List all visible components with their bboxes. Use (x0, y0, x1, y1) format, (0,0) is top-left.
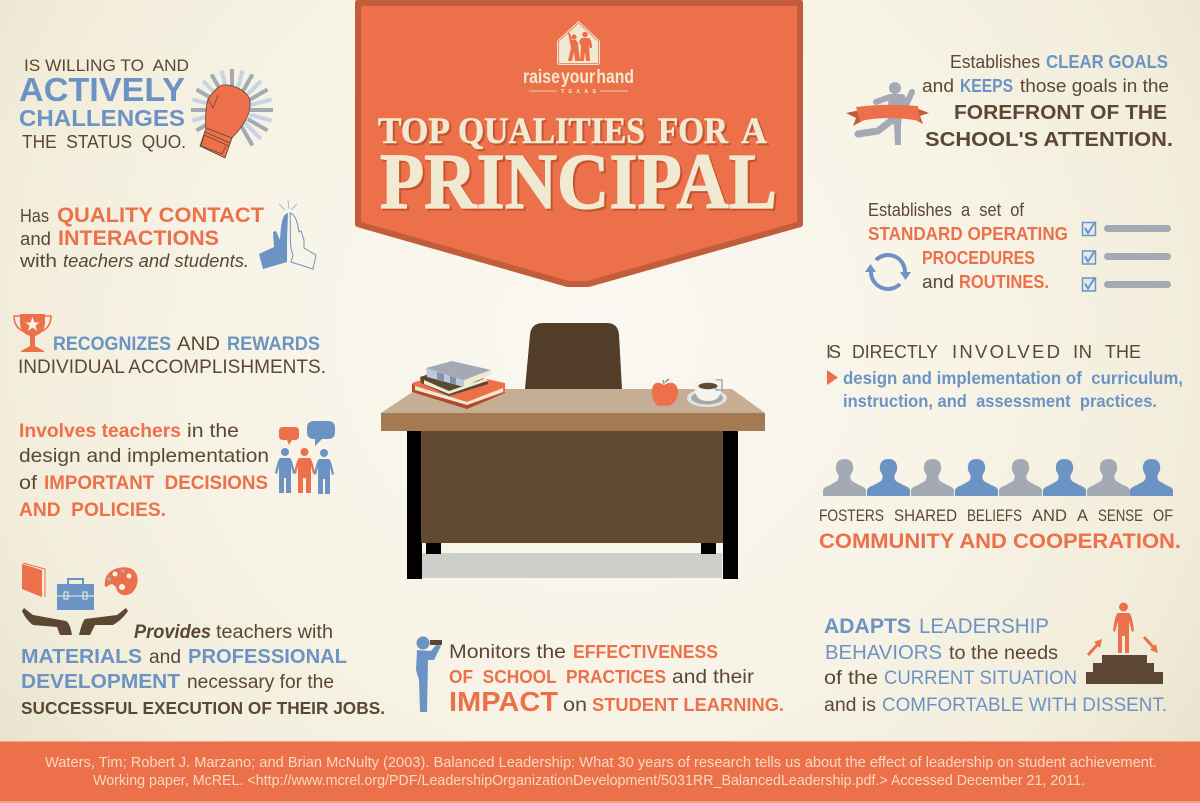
logo: raise your hand Texas: TEXAS (561, 89, 596, 95)
text: involves teachers: design and implementation (19, 445, 269, 467)
text: quality contact: teachers and students. (63, 250, 249, 271)
text: community and cooperation: A (1077, 506, 1089, 525)
icon: trophy (14, 314, 51, 352)
chair (525, 323, 622, 389)
icon: row of silhouettes (823, 459, 1173, 496)
block: adapts leadership (824, 602, 1167, 716)
text: adapts leadership: to the needs (949, 643, 1058, 664)
icon: person with binoculars (416, 636, 442, 712)
text: adapts leadership: CURRENT SITUATION (884, 668, 1077, 689)
text: involves teachers (19, 420, 269, 521)
text: provides materials: and (149, 647, 181, 668)
text: monitors effectiveness: Monitors the (449, 642, 566, 663)
text: clear goals: CLEAR GOALS (1046, 52, 1168, 72)
icon: boxing glove with rays (191, 69, 273, 158)
text: is directly involved: DIRECTLY (852, 341, 938, 362)
text: quality contact: INTERACTIONS (58, 227, 219, 250)
icon: cycle arrows (865, 255, 911, 289)
text: adapts leadership: BEHAVIORS (825, 641, 942, 664)
title banner (355, 0, 803, 287)
icon: person on podium (1086, 602, 1163, 684)
text: clear goals: those goals in the (1020, 75, 1169, 96)
text: recognizes and rewards (18, 333, 326, 378)
block: standard operating procedures (865, 199, 1168, 292)
text: community and cooperation (819, 506, 1181, 553)
text: clear goals: KEEPS (960, 76, 1013, 96)
text: curriculum instruction assessment: instruction, and assessment practices. (843, 391, 1157, 411)
text: clear goals: and (922, 75, 954, 96)
text: community and cooperation: SHARED (894, 506, 957, 525)
text: is directly involved (826, 341, 1141, 362)
text: provides materials: teachers with (216, 622, 333, 643)
text: adapts leadership (824, 615, 1167, 716)
heading: top qualities for a (378, 111, 767, 152)
text: adapts leadership: of the (824, 668, 878, 689)
block: materials and professional development (21, 563, 385, 718)
text: provides materials: MATERIALS (21, 645, 142, 668)
text: quality contact (19, 204, 264, 271)
text: involves teachers: IMPORTANT DECISIONS (44, 473, 268, 494)
icon: checklist (1082, 222, 1168, 291)
text: actively challenges: THE STATUS QUO. (22, 132, 186, 152)
citation text: Waters, Tim; Robert J. Marzano; and Brian McNulty (2003). Balanced Leadership: What 30 years of research tells us about the effect of leadership on student achievement. (45, 755, 1157, 771)
text: actively challenges: IS WILLING TO AND (24, 56, 189, 75)
heading: top qualities for a: A (741, 111, 767, 152)
heading: top qualities for a: QUALITIES (458, 111, 645, 152)
text: standard operating procedures: PROCEDURES (922, 248, 1035, 268)
heading: top qualities for a: FOR (658, 111, 729, 152)
desk top (381, 389, 765, 431)
text: clear goals: Establishes (950, 51, 1040, 72)
illustration: desk (381, 323, 765, 579)
text: community and cooperation: SENSE (1098, 506, 1143, 525)
text: is directly involved: THE (1105, 341, 1141, 362)
text: recognizes and rewards: REWARDS (227, 333, 320, 355)
icon: runner with ribbon (846, 82, 929, 145)
text: adapts leadership: and is (824, 695, 876, 716)
text: recognizes and rewards: INDIVIDUAL ACCOMPLISHMENTS. (18, 356, 326, 378)
text: involves teachers: in the (187, 420, 239, 442)
apple (652, 379, 678, 406)
text: monitors effectiveness: STUDENT LEARNING. (592, 694, 784, 715)
desk panel (421, 431, 723, 543)
text: adapts leadership: COMFORTABLE WITH DISSENT. (882, 695, 1167, 716)
text: provides materials: PROFESSIONAL (188, 645, 347, 668)
text: standard operating procedures: and (922, 271, 954, 292)
footer citation bar (0, 741, 1200, 803)
desk shadow (422, 553, 722, 578)
block: directly involved (826, 341, 1183, 411)
block: community and cooperation (819, 459, 1181, 553)
heading: top qualities for a: TOP (378, 111, 450, 152)
logo: raise your hand Texas: raise your hand (523, 66, 634, 88)
text: provides materials: DEVELOPMENT (21, 670, 180, 693)
block: involves teachers (19, 420, 335, 521)
icon: palette (105, 567, 138, 595)
text: provides materials: necessary for the (187, 672, 334, 693)
text: standard operating procedures: Establishes a set of (868, 199, 1025, 220)
text: monitors effectiveness: IMPACT (449, 686, 558, 717)
block: actively challenges (19, 56, 273, 158)
icon: play arrow (827, 370, 838, 385)
text: involves teachers: AND POLICIES. (19, 500, 166, 521)
text: quality contact: QUALITY CONTACT (57, 204, 264, 227)
block: monitors effectiveness (416, 636, 784, 717)
heading: principal: PRINCIPAL (380, 139, 777, 226)
block: recognizes and rewards (14, 314, 326, 378)
text: provides materials (21, 622, 385, 718)
text: involves teachers: of (19, 472, 38, 494)
text: curriculum instruction assessment (843, 368, 1183, 411)
text: is directly involved: INVOLVED (952, 341, 1060, 362)
text: recognizes and rewards: AND (177, 333, 220, 355)
text: monitors effectiveness (449, 641, 784, 717)
text: adapts leadership: LEADERSHIP (919, 615, 1049, 638)
text: community and cooperation: OF (1153, 506, 1173, 525)
coffee cup (687, 379, 727, 407)
text: clear goals: SCHOOL'S ATTENTION. (925, 129, 1173, 151)
books (412, 361, 505, 409)
text: standard operating procedures: STANDARD OPERATING (868, 224, 1068, 244)
citation text: Working paper, McREL. <http://www.mcrel.org/PDF/LeadershipOrganizationDevelopment/5031RR_BalancedLeadership.pdf.> Accessed December 21, 2011. (93, 773, 1085, 789)
text: monitors effectiveness: and their (672, 667, 755, 688)
text: actively challenges: CHALLENGES (19, 105, 185, 131)
block: quality contact (19, 200, 316, 271)
text: monitors effectiveness: OF SCHOOL PRACTICES (449, 666, 666, 687)
text: community and cooperation: FOSTERS (819, 506, 884, 525)
text: curriculum instruction assessment: design and implementation of curriculum, (843, 368, 1183, 388)
text: is directly involved: IN (1073, 341, 1092, 362)
text: provides materials: SUCCESSFUL EXECUTION OF THEIR JOBS. (21, 698, 385, 718)
icon: high five (259, 200, 316, 269)
icon: briefcase (57, 579, 94, 610)
text: standard operating procedures: ROUTINES. (959, 272, 1049, 292)
logo: raise your hand Texas (523, 21, 634, 95)
text: quality contact: and (20, 228, 51, 249)
text: standard operating procedures (868, 199, 1068, 292)
text: monitors effectiveness: EFFECTIVENESS (573, 641, 718, 662)
desk legs (407, 431, 738, 579)
citation text (45, 755, 1157, 789)
icon: book (22, 563, 45, 597)
icon: open hands (22, 608, 128, 635)
text: involves teachers: Involves teachers (19, 421, 181, 442)
text: community and cooperation: COMMUNITY AND COOPERATION. (819, 529, 1181, 553)
text: quality contact: with (19, 250, 57, 271)
text: actively challenges (19, 56, 189, 152)
text: clear goals: FOREFRONT OF THE (954, 101, 1167, 124)
text: monitors effectiveness: on (563, 695, 587, 716)
text: actively challenges: ACTIVELY (19, 72, 185, 109)
block: clear goals (846, 51, 1173, 151)
text: quality contact: Has (20, 205, 49, 226)
text: clear goals (922, 51, 1173, 151)
text: community and cooperation: AND (1032, 506, 1067, 525)
text: provides materials: Provides (134, 622, 211, 643)
text: adapts leadership: ADAPTS (824, 615, 911, 638)
text: is directly involved: IS (826, 341, 841, 362)
text: recognizes and rewards: RECOGNIZES (53, 333, 171, 355)
icon: three people talking (275, 421, 335, 494)
text: community and cooperation: BELIEFS (967, 506, 1022, 525)
